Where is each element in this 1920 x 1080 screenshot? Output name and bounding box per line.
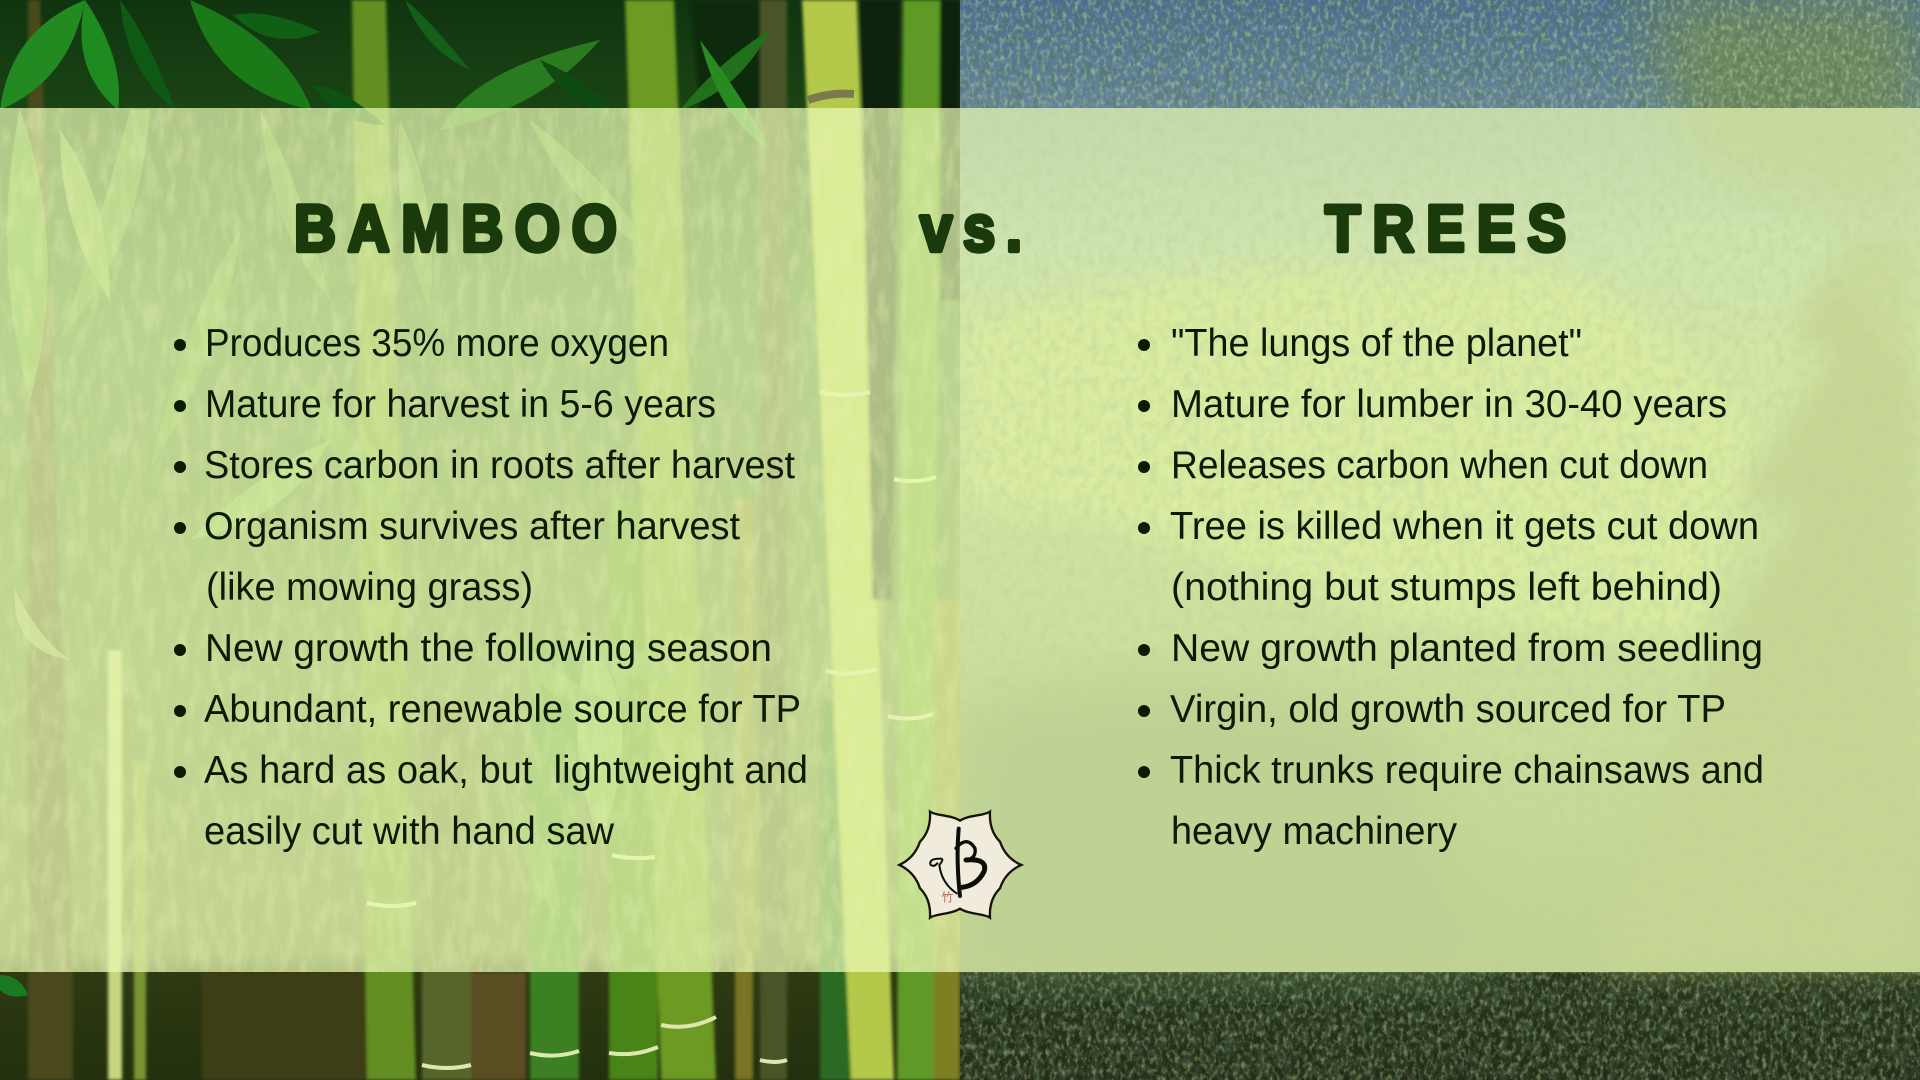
item: killed <box>1138 505 1759 609</box>
bamboo stalks <box>28 0 960 1080</box>
heading: BAMBOO: BAMBOO <box>294 193 617 266</box>
item: maturity: Mature for harvest in 5-6 years <box>205 383 716 426</box>
bamboo leaves, upper left <box>0 0 770 150</box>
dark mass <box>960 679 1500 972</box>
item: new growth: New growth planted from seedling <box>1171 627 1763 670</box>
item: hardness: easily cut with hand saw <box>204 810 615 853</box>
canopy hill <box>960 265 1760 640</box>
item: machinery: heavy machinery <box>1171 810 1457 853</box>
bamboo stalk nodes <box>367 94 936 1068</box>
forest texture <box>960 0 1920 1080</box>
item: lungs: "The lungs of the planet" <box>1171 322 1582 365</box>
item: hardness <box>174 749 808 853</box>
logo seal: 竹 <box>941 890 953 904</box>
item: survival: Organism survives after harvest <box>204 505 740 548</box>
item: survival: (like mowing grass) <box>206 566 533 609</box>
background photo: bamboo grove <box>0 0 960 1080</box>
bamboo texture <box>0 108 960 972</box>
item: oxygen: Produces 35% more oxygen <box>205 322 669 365</box>
item: carbon: Stores carbon in roots after harvest <box>204 444 795 487</box>
item: killed: Tree is killed when it gets cut down <box>1170 505 1759 548</box>
lower band foliage speckle <box>960 972 1920 1080</box>
item: source: Virgin, old growth sourced for TP <box>1170 688 1726 731</box>
list: bamboo facts <box>174 322 808 853</box>
item: maturity: Mature for lumber in 30-40 years <box>1171 383 1727 426</box>
logo badge <box>899 812 1021 918</box>
heading: TREES: TREES <box>1325 193 1566 266</box>
canopy, upper right <box>1640 0 1920 230</box>
heading: vs.: vs. <box>920 193 1022 266</box>
bamboo leaves, faded under panel <box>7 110 632 840</box>
item: source: Abundant, renewable source for TP <box>204 688 801 731</box>
list: tree facts <box>1138 322 1764 853</box>
item: new growth: New growth the following season <box>205 627 772 670</box>
item: carbon: Releases carbon when cut down <box>1171 444 1708 487</box>
dark conifers <box>1600 240 1920 972</box>
item: machinery <box>1138 749 1764 853</box>
background photo: conifer forest <box>960 0 1920 1080</box>
logo monogram <box>930 829 985 896</box>
leaf, lower left corner <box>0 975 28 997</box>
icon: lotus logo <box>899 812 1021 918</box>
translucent panel <box>0 108 1920 972</box>
item: survival <box>174 505 740 609</box>
upper band canopy speckle <box>960 0 1920 108</box>
item: machinery: Thick trunks require chainsaws and <box>1170 749 1764 792</box>
blue haze band <box>1640 220 1860 290</box>
item: hardness: As hard as oak, but lightweight and <box>204 749 808 792</box>
item: killed: (nothing but stumps left behind) <box>1171 566 1722 609</box>
